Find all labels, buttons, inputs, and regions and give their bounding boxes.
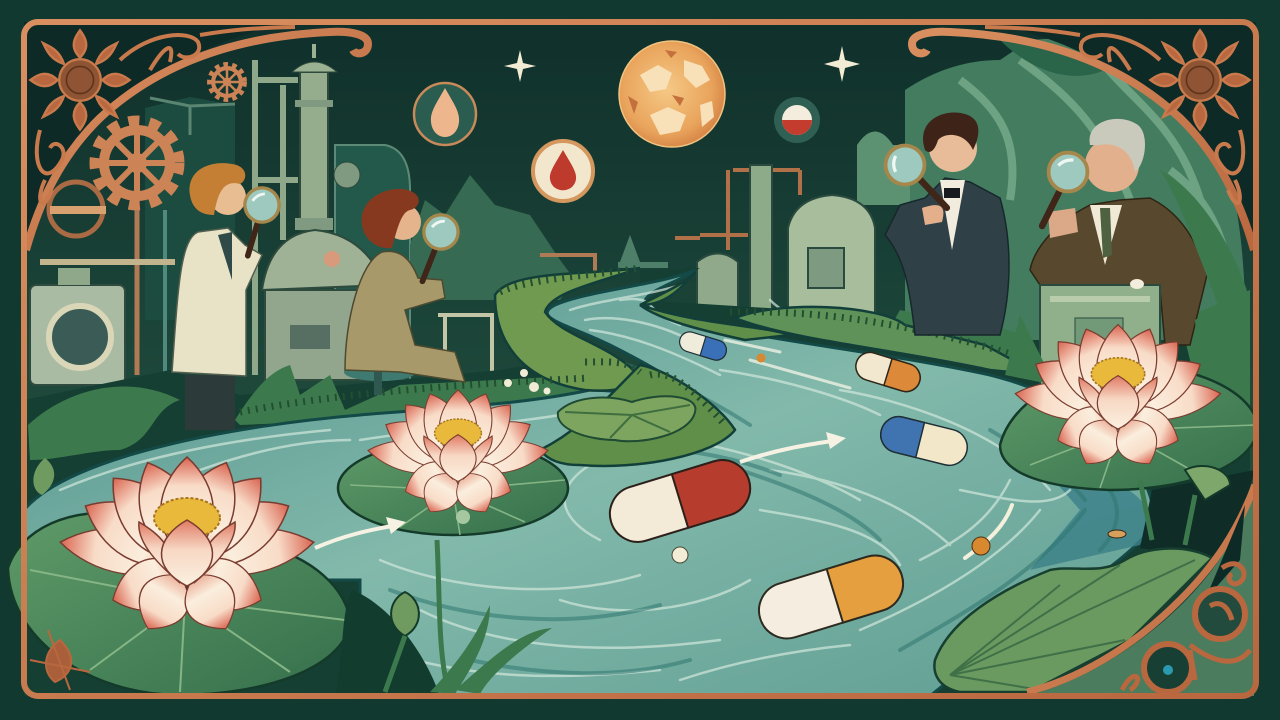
land behind river — [24, 268, 1250, 696]
left machinery — [30, 44, 595, 385]
bubble icon: half-filled capsule — [774, 97, 820, 143]
green ballot box — [1040, 279, 1160, 385]
capsule: small blue — [677, 329, 729, 363]
arrow: from lotus to lily pad — [315, 517, 406, 548]
river dark teal shade — [1030, 470, 1152, 570]
figure: older man in brown suit — [1030, 119, 1207, 345]
lily pad on peninsula — [558, 396, 695, 441]
lotus: large left — [57, 453, 317, 641]
foliage right bank — [1005, 170, 1250, 400]
capsule: red and white — [603, 453, 757, 549]
small floating pellets — [456, 354, 1126, 563]
figure: seated scientist in brown — [344, 189, 465, 395]
left factory backdrop — [145, 97, 668, 380]
river — [24, 270, 1155, 696]
figure: scientist in white coat — [172, 163, 287, 430]
copper ornament: top-right corner — [912, 22, 1256, 250]
river swirls — [60, 285, 1070, 680]
bubble icon: oil drop — [414, 83, 476, 145]
river highlight streak — [965, 505, 1012, 558]
lotus: middle — [366, 387, 550, 521]
moon — [619, 41, 725, 147]
lily pad: fan leaf lower right — [934, 548, 1212, 692]
arrow: between capsules — [740, 432, 846, 462]
figure: man in dark suit — [878, 112, 1009, 335]
dark corner behind right pads — [1140, 470, 1255, 560]
mossy peninsula — [495, 268, 1040, 466]
bubble icon: blood drop — [533, 141, 593, 201]
copper ornament: top-left corner — [24, 22, 368, 250]
right machinery — [675, 165, 875, 318]
pebbles on left bank — [504, 369, 550, 394]
foreground plants lower left — [33, 458, 1230, 696]
capsule: orange and white — [752, 549, 910, 645]
capsule: blue and cream — [877, 413, 971, 469]
lily pad: middle — [338, 441, 568, 535]
capsule: small orange — [852, 349, 924, 395]
copper ornament: bottom-right corner — [1027, 485, 1255, 696]
stars — [504, 46, 860, 82]
right garden backdrop — [857, 39, 1245, 350]
foliage left bank — [28, 290, 1250, 460]
lotus: right — [1013, 321, 1223, 474]
copper ornament: bottom-left corner — [30, 630, 90, 690]
lily pad: large lower left — [8, 513, 350, 695]
lily pad: right — [1000, 365, 1258, 490]
grassy fringe on banks — [240, 268, 1030, 425]
